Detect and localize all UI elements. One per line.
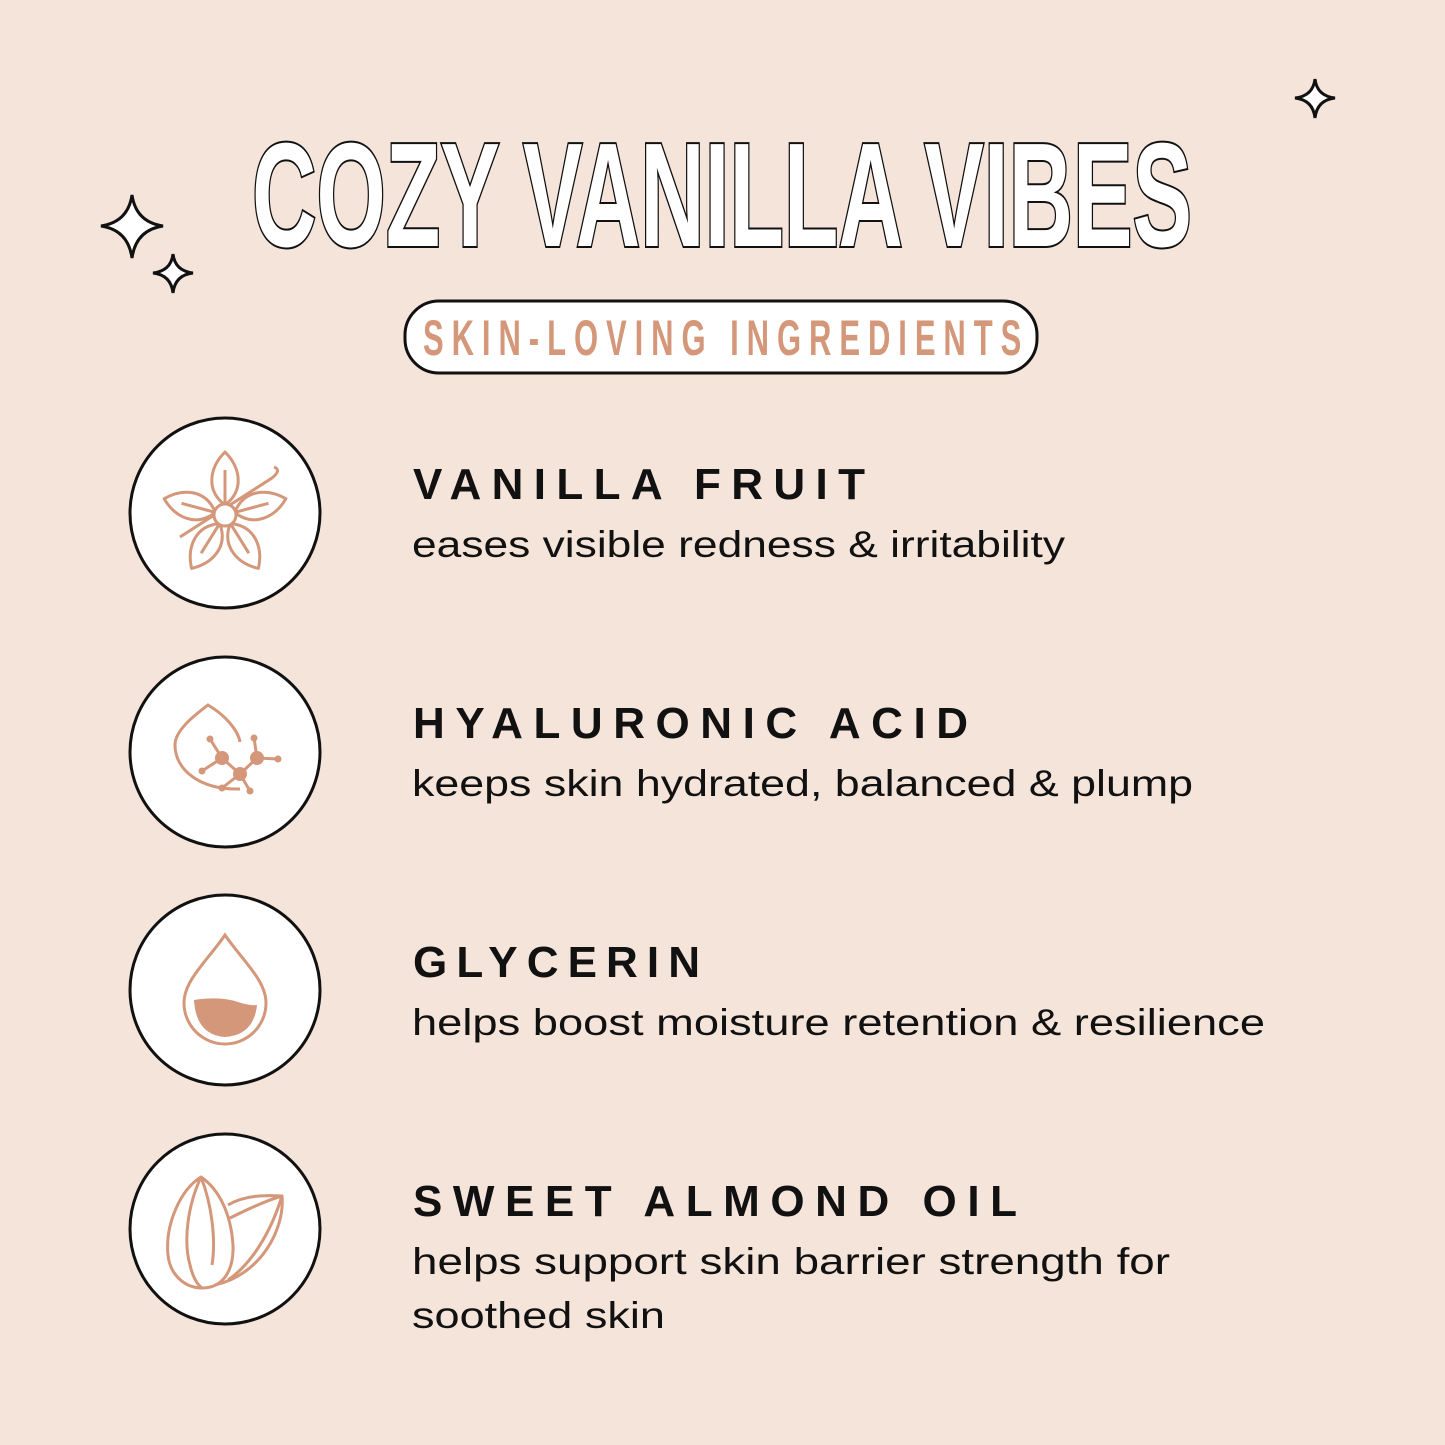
heading: GLYCERIN bbox=[413, 938, 700, 987]
icon: almonds bbox=[130, 1134, 320, 1324]
description: helps support skin barrier strength for bbox=[412, 1241, 1170, 1282]
item: sweet almond oil bbox=[130, 1134, 1170, 1336]
heading: VANILLA FRUIT bbox=[413, 460, 865, 509]
icon: sparkle large left bbox=[101, 195, 163, 258]
icon: sparkle small left bbox=[153, 254, 193, 293]
icon: drop with molecule bbox=[130, 657, 320, 847]
heading: SWEET ALMOND OIL bbox=[413, 1177, 1017, 1226]
icon: vanilla flower bbox=[130, 418, 320, 608]
item: vanilla fruit bbox=[130, 418, 1066, 608]
description: soothed skin bbox=[412, 1295, 665, 1336]
item: glycerin bbox=[130, 895, 1265, 1085]
description bbox=[412, 1241, 1170, 1336]
heading: HYALURONIC ACID bbox=[413, 699, 968, 748]
icon: half-filled drop bbox=[130, 895, 320, 1085]
description: keeps skin hydrated, balanced & plump bbox=[412, 763, 1193, 804]
description: helps boost moisture retention & resilience bbox=[412, 1002, 1265, 1043]
description: eases visible redness & irritability bbox=[412, 524, 1066, 565]
item: hyaluronic acid bbox=[130, 657, 1193, 847]
badge: skin-loving ingredients: SKIN-LOVING INGREDIENTS bbox=[423, 309, 1021, 366]
icon: sparkle top right bbox=[1295, 79, 1335, 118]
